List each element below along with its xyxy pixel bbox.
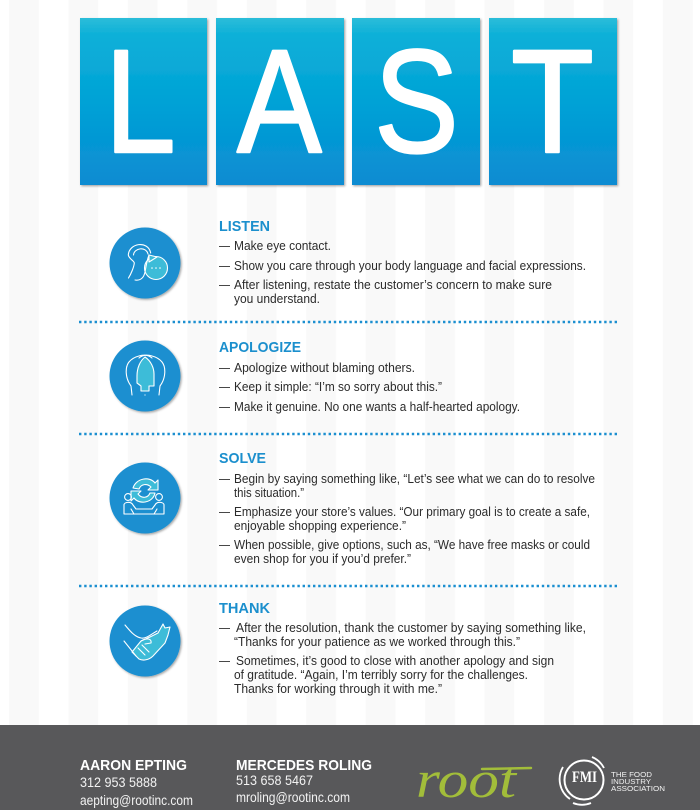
text block: solve tips <box>219 471 595 566</box>
text block: apologize tips: Keep it simple: “I’m so sorry about this.” <box>234 379 442 394</box>
card: letter L <box>80 18 207 185</box>
text block: listen tips <box>219 238 586 306</box>
heading: thank: THANK <box>219 600 270 617</box>
text block: solve tips: When possible, give options, such as, “We have free masks or could <box>234 537 590 552</box>
text block: listen tips: you understand. <box>234 291 320 306</box>
contact: Mercedes Roling: 513 658 5467 <box>236 773 313 788</box>
contact: Aaron Epting: 312 953 5888 <box>80 775 157 790</box>
logo: FMI: THE FOOD <box>611 772 652 779</box>
text block: thank tips <box>219 620 586 696</box>
text block: thank tips: — <box>219 653 230 668</box>
text block: listen tips: — <box>219 258 230 273</box>
text block: apologize tips: — <box>219 360 230 375</box>
text block: solve tips: — <box>219 504 230 519</box>
card: letter L: L <box>105 20 176 184</box>
icon: ear and speech bubble <box>110 228 180 298</box>
heading: solve: SOLVE <box>219 450 266 467</box>
text block: apologize tips <box>219 360 520 414</box>
text block: solve tips: — <box>219 471 230 486</box>
text block: apologize tips: Apologize without blaming others. <box>234 360 415 375</box>
logo: FMI: ASSOCIATION <box>611 786 665 793</box>
heading: listen: LISTEN <box>219 218 270 235</box>
card: letter T: T <box>511 19 594 183</box>
text block: solve tips: Begin by saying something like, “Let’s see what we can do to resolve <box>234 471 595 486</box>
text block: solve tips: enjoyable shopping experience.” <box>234 518 406 533</box>
contact: Mercedes Roling: mroling@rootinc.com <box>236 790 350 805</box>
logo: FMI: FMI <box>572 769 597 786</box>
text block: thank tips: “Thanks for your patience as we worked through this.” <box>234 634 520 649</box>
contact: Aaron Epting: aepting@rootinc.com <box>80 793 193 808</box>
card: letter A: A <box>237 20 322 184</box>
card: letter A <box>216 18 344 185</box>
text block: solve tips: even shop for you if you’d prefer.” <box>234 551 411 566</box>
text block: thank tips: — <box>219 620 230 635</box>
text block: apologize tips: — <box>219 379 230 394</box>
text block: solve tips: Emphasize your store’s values. “Our primary goal is to create a safe, <box>234 504 590 519</box>
card: letter S <box>352 18 480 185</box>
text block: solve tips: this situation.” <box>234 485 304 500</box>
contact: Mercedes Roling: MERCEDES ROLING <box>236 757 372 774</box>
text block: listen tips: Make eye contact. <box>234 238 331 253</box>
text block: solve tips: — <box>219 537 230 552</box>
card: letter S: S <box>374 20 459 184</box>
text block: thank tips: Sometimes, it’s good to close with another apology and sign <box>236 653 554 668</box>
contact: Aaron Epting <box>80 757 193 808</box>
contact: Aaron Epting: AARON EPTING <box>80 757 187 774</box>
text block: apologize tips: — <box>219 399 230 414</box>
text block: thank tips: Thanks for working through it with me.” <box>234 681 442 696</box>
title: LAST letter cards <box>80 18 617 185</box>
logo: FMI: INDUSTRY <box>611 779 651 786</box>
panel: listen <box>110 218 586 306</box>
panel: solve <box>110 450 595 566</box>
heading: apologize: APOLOGIZE <box>219 339 301 356</box>
logo: root: root <box>416 752 518 809</box>
text block: listen tips: — <box>219 238 230 253</box>
logo: FMI <box>560 757 665 805</box>
text block: listen tips: After listening, restate the customer’s concern to make sure <box>234 277 552 292</box>
card: letter T <box>489 18 617 185</box>
text block: thank tips: of gratitude. “Again, I’m terribly sorry for the challenges. <box>234 667 528 682</box>
icon: handshake <box>110 606 180 676</box>
text block: listen tips: — <box>219 277 230 292</box>
contact: Mercedes Roling <box>236 757 372 805</box>
panel: apologize <box>110 339 520 414</box>
panel: thank <box>110 600 586 696</box>
icon: overlapping heads <box>110 340 180 412</box>
text block: apologize tips: Make it genuine. No one wants a half-hearted apology. <box>234 399 520 414</box>
icon: two people at table with cycle arrows <box>110 462 180 534</box>
text block: listen tips: Show you care through your body language and facial expressions. <box>234 258 586 273</box>
text block: thank tips: After the resolution, thank the customer by saying something like, <box>236 620 586 635</box>
footer <box>0 725 700 810</box>
